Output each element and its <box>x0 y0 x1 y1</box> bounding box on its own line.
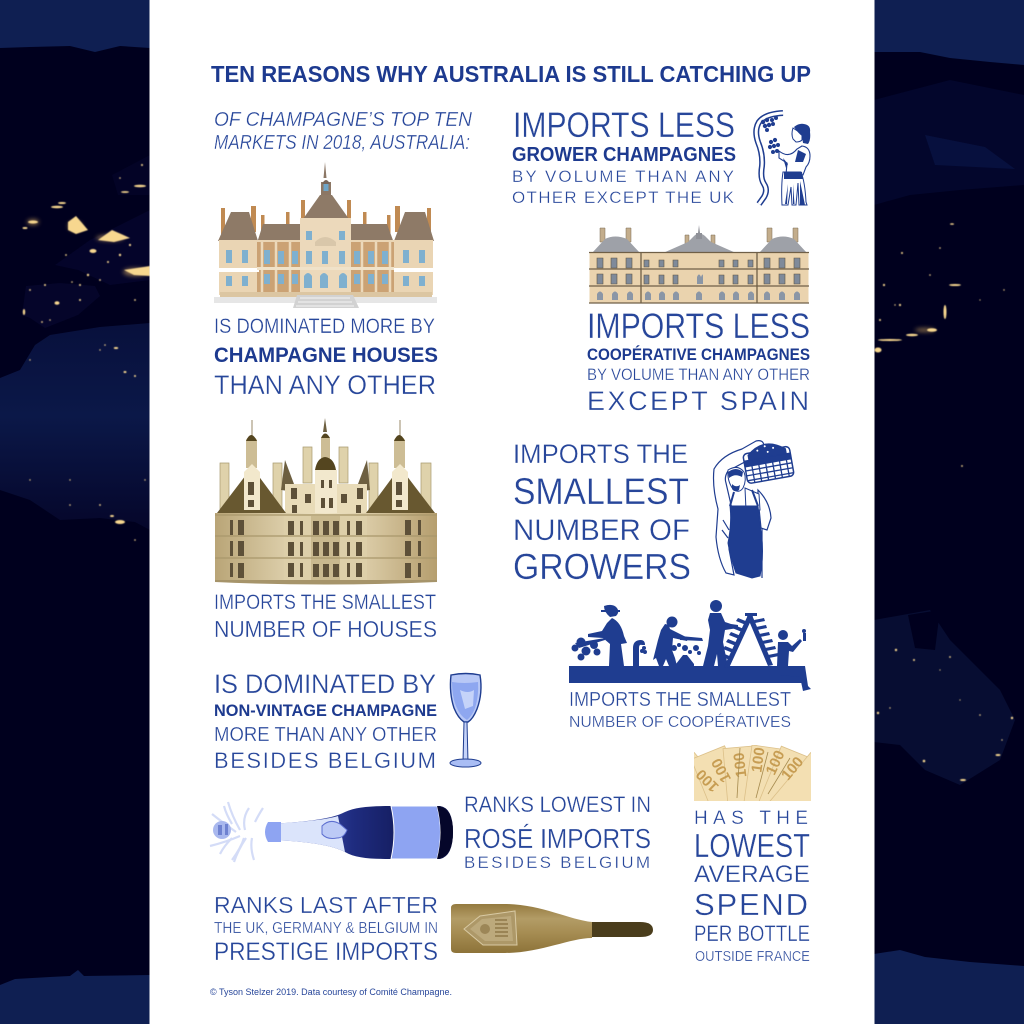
copyright footer: © Tyson Stelzer 2019. Data courtesy of Comité Champagne. <box>210 987 452 997</box>
white poster panel <box>150 0 874 1024</box>
text: dominated by non-vintage <box>214 669 437 773</box>
text: imports less coopérative champagnes: IMPORTS LESS <box>587 307 810 346</box>
icon: grand château with tan façade <box>214 162 437 308</box>
icon: beige palace <box>589 225 809 303</box>
icon: fan of hundred-dollar notes: 100 <box>763 748 789 778</box>
text: dominated by non-vintage: NON-VINTAGE CHAMPAGNE <box>214 701 437 720</box>
text: smallest number of coopératives: NUMBER OF COOPÉRATIVES <box>569 712 791 731</box>
icon: grower carrying grape basket <box>714 440 794 578</box>
text: ranks lowest in rosé imports: ROSÉ IMPORTS <box>464 823 651 854</box>
text: lowest average spend: AVERAGE <box>694 861 810 888</box>
icon: fan of hundred-dollar notes <box>694 745 811 801</box>
text: ranks lowest in rosé imports <box>464 792 651 872</box>
icon: fan of hundred-dollar notes: 100 <box>731 752 750 779</box>
icon: fan of hundred-dollar notes: 100 <box>778 754 807 784</box>
text: lowest average spend <box>694 808 810 965</box>
text: imports the smallest number of growers: SMALLEST <box>513 471 689 512</box>
text: imports less grower champagnes: GROWER CHAMPAGNES <box>512 144 736 166</box>
icon: gold prestige bottle <box>451 904 653 953</box>
title: TEN REASONS WHY AUSTRALIA IS STILL CATCHING UP <box>211 61 811 87</box>
text: dominated by non-vintage: MORE THAN ANY OTHER <box>214 724 437 746</box>
intro text: MARKETS IN 2018, AUSTRALIA: <box>214 132 470 154</box>
text: smallest number of houses: IMPORTS THE SMALLEST <box>214 591 436 614</box>
text: dominated by houses <box>214 315 438 400</box>
text: imports less grower champagnes: IMPORTS LESS <box>513 106 735 145</box>
text: lowest average spend: OUTSIDE FRANCE <box>695 948 810 965</box>
icon: fan of hundred-dollar notes: 100 <box>693 765 723 795</box>
text: imports less coopérative champagnes <box>587 307 810 416</box>
text: imports the smallest number of growers: IMPORTS THE <box>513 439 688 469</box>
text: imports less coopérative champagnes: EXCEPT SPAIN <box>587 386 809 416</box>
text: ranks last in prestige imports: THE UK, GERMANY & BELGIUM IN <box>214 920 438 937</box>
icon: fan of hundred-dollar notes: 100 <box>748 746 769 774</box>
intro text: OF CHAMPAGNE’S TOP TEN <box>214 109 473 131</box>
text: ranks last in prestige imports <box>214 892 438 966</box>
text: ranks last in prestige imports: PRESTIGE IMPORTS <box>214 938 438 966</box>
icon: spraying champagne bottle <box>210 802 453 862</box>
text: imports the smallest number of growers <box>513 439 691 587</box>
text: lowest average spend: PER BOTTLE <box>694 921 810 946</box>
text: imports less grower champagnes <box>512 106 736 207</box>
text: smallest number of coopératives: IMPORTS THE SMALLEST <box>569 689 791 711</box>
text: lowest average spend: HAS THE <box>694 808 808 829</box>
text: imports less grower champagnes: OTHER EXCEPT THE UK <box>512 188 735 207</box>
text: smallest number of houses: NUMBER OF HOUSES <box>214 616 437 642</box>
text: dominated by houses: THAN ANY OTHER <box>214 370 436 400</box>
text: imports the smallest number of growers: GROWERS <box>513 546 691 587</box>
text: imports less coopérative champagnes: COOPÉRATIVE CHAMPAGNES <box>587 345 810 364</box>
icon: woman picking grapes <box>756 113 810 205</box>
text: lowest average spend: LOWEST <box>694 827 810 864</box>
text: dominated by non-vintage: IS DOMINATED BY <box>214 669 436 699</box>
icon: fan of hundred-dollar notes: 100 <box>708 755 735 785</box>
text: dominated by houses: IS DOMINATED MORE BY <box>214 315 435 338</box>
text: imports less grower champagnes: BY VOLUME THAN ANY <box>512 167 734 186</box>
text: lowest average spend: SPEND <box>694 887 808 922</box>
icon: Chambord-style château <box>215 418 437 584</box>
text: smallest number of coopératives <box>569 689 791 731</box>
text: imports less coopérative champagnes: BY VOLUME THAN ANY OTHER <box>587 365 810 384</box>
text: ranks last in prestige imports: RANKS LAST AFTER <box>214 892 438 918</box>
icon: vineyard workers silhouette <box>569 600 811 691</box>
text: smallest number of houses <box>214 591 437 642</box>
text: dominated by non-vintage: BESIDES BELGIUM <box>214 748 436 773</box>
text: ranks lowest in rosé imports: RANKS LOWEST IN <box>464 792 651 817</box>
intro text <box>214 109 473 154</box>
text: dominated by houses: CHAMPAGNE HOUSES <box>214 344 438 367</box>
text: imports the smallest number of growers: NUMBER OF <box>513 514 690 547</box>
text: ranks lowest in rosé imports: BESIDES BELGIUM <box>464 853 650 872</box>
icon: champagne flute <box>450 674 481 767</box>
